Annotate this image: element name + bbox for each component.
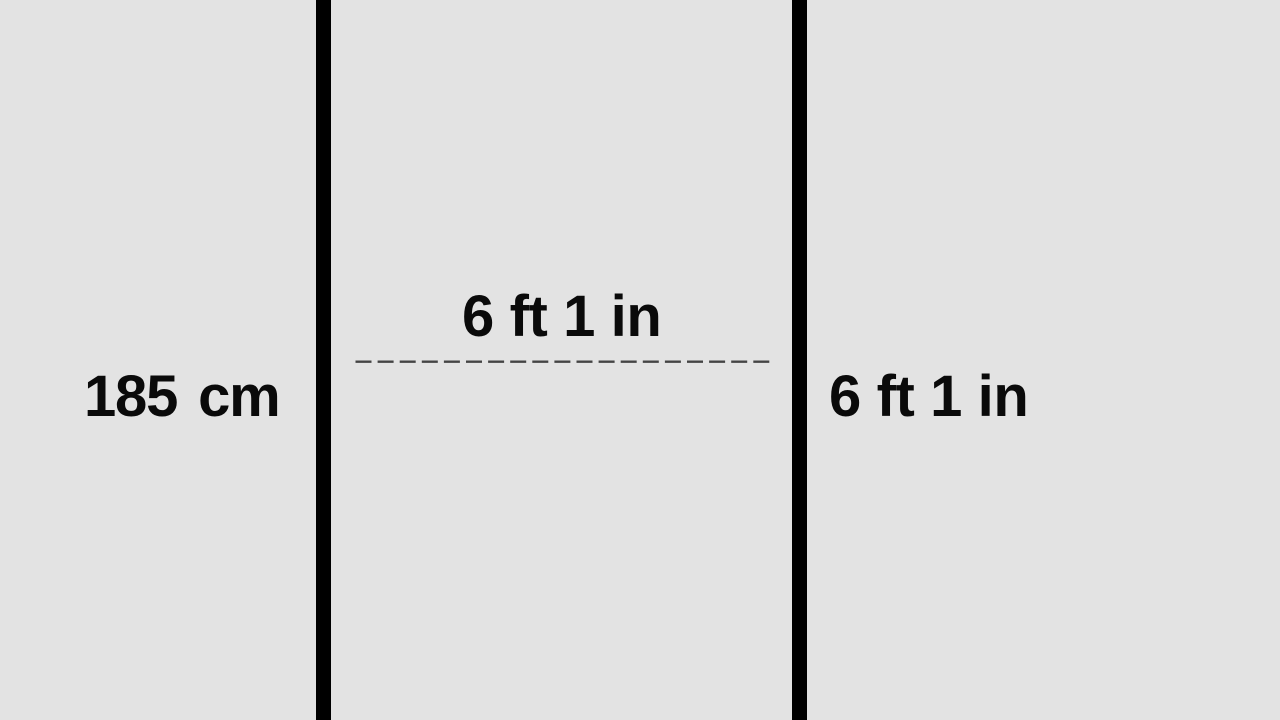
dashed height line [356,360,770,363]
right vertical bar [792,0,807,720]
label: 185 cm: 185 cm [84,364,280,429]
left vertical bar [316,0,331,720]
label: 6 ft 1 in right: 6 ft 1 in [829,364,1028,429]
label: 6 ft 1 in above dashed line: 6 ft 1 in [462,284,661,349]
